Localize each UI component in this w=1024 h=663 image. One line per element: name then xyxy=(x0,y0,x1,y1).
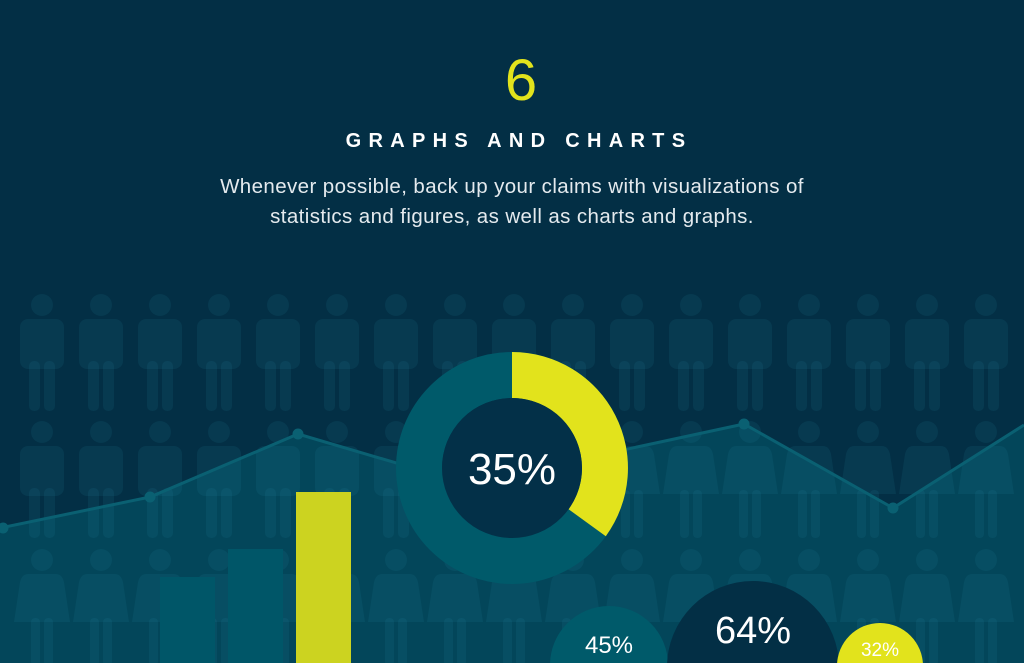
bubble 45% xyxy=(550,606,668,663)
subtitle: statistics and figures, as well as charts and graphs. xyxy=(270,205,754,228)
bubble 64% xyxy=(667,581,839,663)
subtitle: Whenever possible, back up your claims with visualizations of xyxy=(220,175,804,198)
subtitle xyxy=(220,175,804,228)
donut chart 35% xyxy=(419,352,628,561)
bubble 32% xyxy=(837,623,923,663)
area under line chart xyxy=(0,424,1024,663)
bubble 32%: 32% xyxy=(861,640,899,661)
step number: 6 xyxy=(505,48,537,113)
line chart xyxy=(0,420,1024,532)
donut chart 35%: 35% xyxy=(468,445,556,494)
bubble 64%: 64% xyxy=(715,610,791,652)
title: GRAPHS AND CHARTS xyxy=(346,130,692,152)
people pictogram grid xyxy=(14,294,1014,663)
bar chart xyxy=(160,492,351,663)
bubble 45%: 45% xyxy=(585,632,633,659)
